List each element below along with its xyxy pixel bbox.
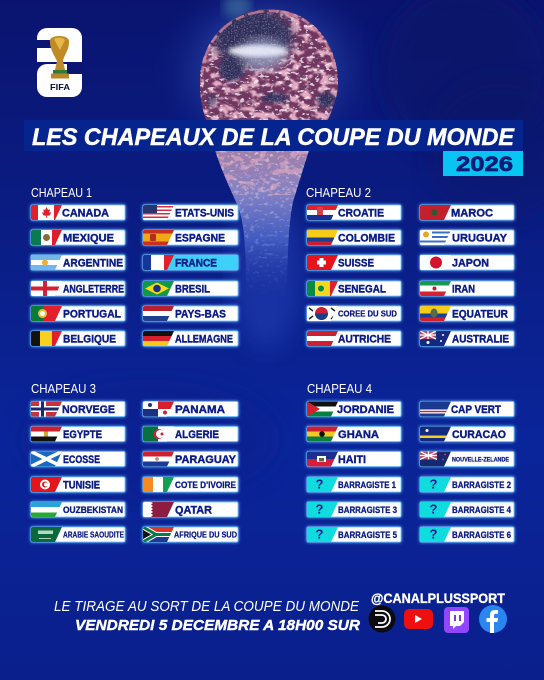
Croatie xyxy=(307,205,401,220)
Barragiste 4: BARRAGISTE 4 xyxy=(452,505,512,516)
Barragiste 2: ? xyxy=(430,476,438,492)
Argentine xyxy=(31,255,125,270)
Senegal: SENEGAL xyxy=(338,284,386,296)
Angleterre xyxy=(31,281,125,296)
Haiti xyxy=(307,452,401,466)
Australie: AUSTRALIE xyxy=(452,334,509,346)
Paraguay xyxy=(143,452,238,466)
heading: chapeau 4: CHAPEAU 4 xyxy=(307,381,372,396)
Barragiste 1: BARRAGISTE 1 xyxy=(338,480,397,491)
Arabie Saoudite: ARABIE SAOUDITE xyxy=(63,530,124,540)
Barragiste 4 xyxy=(420,502,514,517)
Barragiste 3 xyxy=(307,502,401,517)
Coree du Sud: COREE DU SUD xyxy=(338,309,397,319)
Autriche xyxy=(307,331,401,346)
Maroc: MAROC xyxy=(451,208,493,220)
pot 1 xyxy=(31,205,238,346)
Barragiste 1 xyxy=(307,476,401,492)
Barragiste 5: BARRAGISTE 5 xyxy=(338,530,398,541)
pot 4 xyxy=(307,402,514,542)
draw announcement: VENDREDI 5 DECEMBRE A 18H00 SUR xyxy=(75,617,360,634)
Barragiste 5 xyxy=(307,526,401,542)
Equateur xyxy=(420,306,514,321)
Egypte: EGYPTE xyxy=(63,429,102,441)
Ghana xyxy=(307,426,401,442)
Haiti: HAITI xyxy=(338,454,366,466)
Croatie: CROATIE xyxy=(338,208,384,220)
draw announcement: LE TIRAGE AU SORT DE LA COUPE DU MONDE xyxy=(54,598,360,615)
Jordanie: JORDANIE xyxy=(337,404,394,416)
Colombie xyxy=(307,230,401,245)
Uruguay xyxy=(420,230,514,245)
Barragiste 5: ? xyxy=(316,526,324,542)
icon: Facebook xyxy=(479,605,507,633)
Curacao: CURACAO xyxy=(452,429,506,441)
Cap Vert xyxy=(420,402,514,416)
Qatar: QATAR xyxy=(175,504,212,516)
Iran: IRAN xyxy=(452,284,475,296)
Ouzbekistan: OUZBEKISTAN xyxy=(63,505,123,516)
Etats-Unis: ETATS-UNIS xyxy=(175,208,234,220)
Barragiste 3: ? xyxy=(316,502,324,516)
Angleterre: ANGLETERRE xyxy=(63,284,124,296)
Belgique: BELGIQUE xyxy=(63,334,116,346)
Cote d'Ivoire: COTE D'IVOIRE xyxy=(175,480,236,490)
Panama: PANAMA xyxy=(175,404,225,416)
Barragiste 1: ? xyxy=(316,476,324,492)
Arabie Saoudite xyxy=(31,527,125,542)
Barragiste 4: ? xyxy=(430,502,438,516)
Qatar xyxy=(143,502,238,517)
Equateur: EQUATEUR xyxy=(452,308,508,320)
Uruguay: URUGUAY xyxy=(452,232,508,244)
Ouzbekistan xyxy=(31,502,125,517)
heading: chapeau 1: CHAPEAU 1 xyxy=(31,185,92,200)
icon: Twitch xyxy=(444,607,469,633)
Japon xyxy=(420,255,514,270)
Nouvelle-Zelande xyxy=(420,452,514,466)
Allemagne xyxy=(143,331,238,346)
Ecosse xyxy=(31,452,125,466)
Bresil: BRESIL xyxy=(175,284,210,296)
Paraguay: PARAGUAY xyxy=(175,454,237,466)
Argentine: ARGENTINE xyxy=(63,258,123,270)
trophy illustration xyxy=(178,0,358,350)
Colombie: COLOMBIE xyxy=(338,232,395,244)
Mexique: MEXIQUE xyxy=(63,232,114,244)
Pays-Bas: PAYS-BAS xyxy=(175,308,226,320)
heading: chapeau 3: CHAPEAU 3 xyxy=(31,381,96,396)
Barragiste 3: BARRAGISTE 3 xyxy=(338,505,397,516)
Ecosse: ECOSSE xyxy=(63,454,100,466)
Suisse xyxy=(307,255,401,270)
Autriche: AUTRICHE xyxy=(338,334,391,346)
Belgique xyxy=(31,331,125,346)
Suisse: SUISSE xyxy=(338,258,374,270)
pot 3 xyxy=(31,402,238,542)
Bresil xyxy=(143,281,238,296)
Canada xyxy=(31,205,125,220)
Nouvelle-Zelande: NOUVELLE-ZELANDE xyxy=(452,456,510,464)
year badge: 2026 xyxy=(456,153,513,176)
Algerie xyxy=(143,426,238,442)
icon: streaming channel xyxy=(368,606,396,632)
Norvege xyxy=(31,402,125,416)
Norvege: NORVEGE xyxy=(62,404,115,416)
draw announcement xyxy=(54,598,360,634)
Algerie: ALGERIE xyxy=(175,429,219,441)
Portugal xyxy=(31,306,125,321)
Cote d'Ivoire xyxy=(143,477,238,492)
Portugal: PORTUGAL xyxy=(63,308,121,320)
title banner: LES CHAPEAUX DE LA COUPE DU MONDE xyxy=(32,124,515,151)
Allemagne: ALLEMAGNE xyxy=(175,334,233,346)
social handle: @CANALPLUSSPORT xyxy=(371,590,505,606)
Mexique xyxy=(31,230,125,245)
France: FRANCE xyxy=(175,258,217,270)
Barragiste 2: BARRAGISTE 2 xyxy=(452,480,511,491)
Maroc xyxy=(420,205,514,220)
Pays-Bas xyxy=(143,306,238,321)
Barragiste 2 xyxy=(420,476,514,492)
pot 2 xyxy=(307,205,514,346)
Cap Vert: CAP VERT xyxy=(451,404,501,416)
Afrique du Sud xyxy=(143,527,238,542)
Coree du Sud xyxy=(307,306,401,321)
Australie xyxy=(420,331,514,346)
heading: chapeau 2: CHAPEAU 2 xyxy=(306,185,371,200)
Iran xyxy=(420,281,514,296)
icon: YouTube xyxy=(404,609,433,629)
Ghana: GHANA xyxy=(338,429,379,441)
Tunisie: TUNISIE xyxy=(63,480,100,492)
Barragiste 6: BARRAGISTE 6 xyxy=(452,530,511,541)
Afrique du Sud: AFRIQUE DU SUD xyxy=(174,530,237,540)
Espagne: ESPAGNE xyxy=(175,232,225,244)
France xyxy=(143,255,238,270)
logo: FIFA 26: FIFA xyxy=(50,82,70,92)
Panama xyxy=(143,402,238,416)
Barragiste 6: ? xyxy=(430,526,438,542)
logo: FIFA 26 xyxy=(37,28,82,97)
Barragiste 6 xyxy=(420,526,514,542)
year badge xyxy=(443,151,523,176)
Senegal xyxy=(307,281,401,296)
Canada: CANADA xyxy=(62,208,109,220)
Tunisie xyxy=(31,477,125,492)
Etats-Unis xyxy=(143,205,238,220)
Jordanie xyxy=(307,402,401,416)
Egypte xyxy=(31,426,125,442)
Curacao xyxy=(420,426,514,442)
Espagne xyxy=(143,230,238,245)
Japon: JAPON xyxy=(452,258,489,270)
